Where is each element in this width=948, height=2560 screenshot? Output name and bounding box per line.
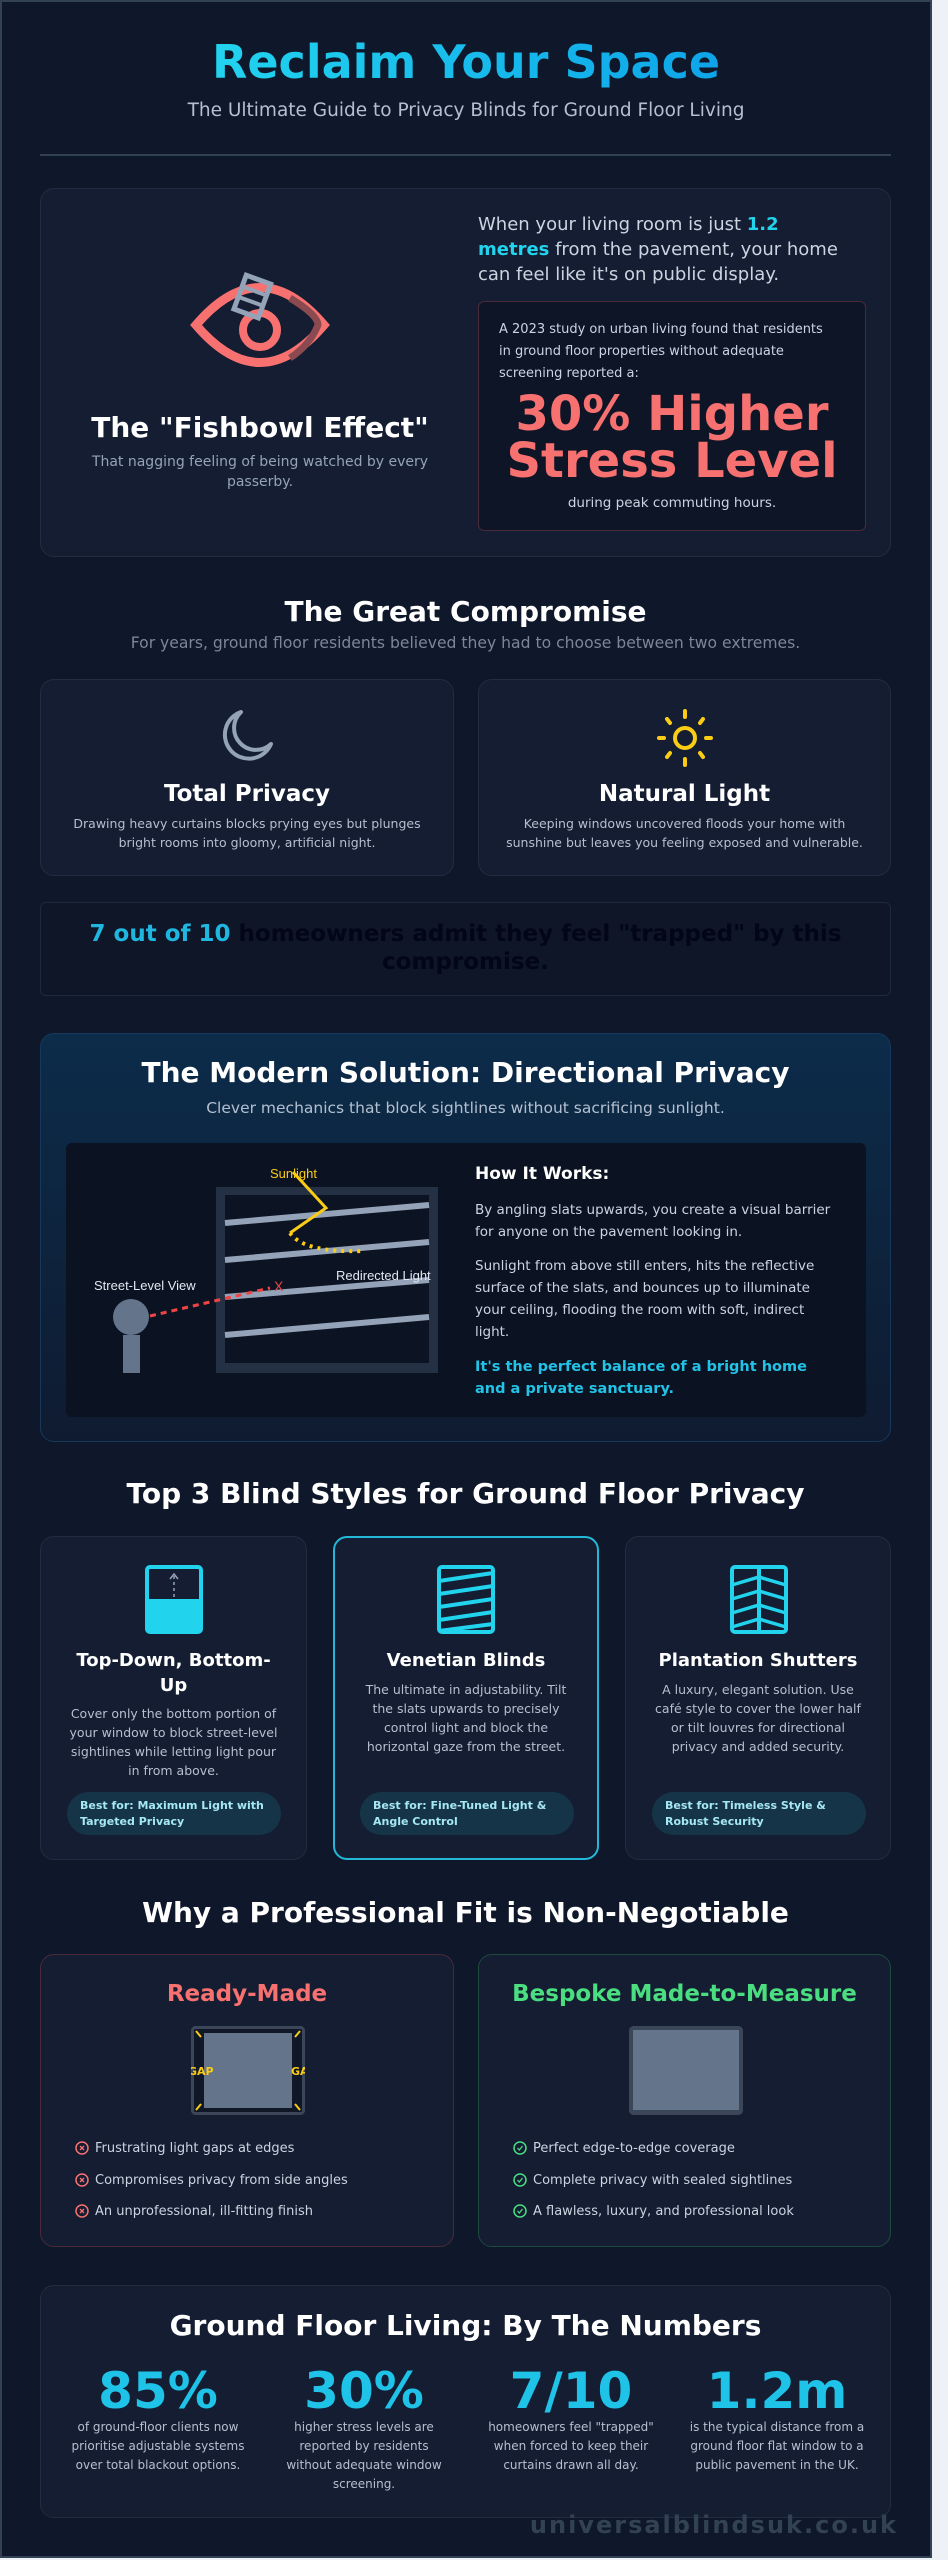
diagram: slats and sightlines: Street-Level View xyxy=(94,1278,196,1293)
text: Keeping windows uncovered floods your home with xyxy=(524,816,845,831)
stat: 85%: of ground-floor clients now xyxy=(78,2420,238,2434)
diagram: slats and sightlines xyxy=(94,1166,438,1373)
stat: 1.2m xyxy=(690,2362,864,2472)
icon: sun xyxy=(657,709,713,767)
list: cons: Frustrating light gaps at edges xyxy=(95,2141,294,2156)
callout: 7 out of 10: 7 out of 10 homeowners admit they feel "trapped" by this xyxy=(90,921,841,947)
pill: best for: Robust Security xyxy=(665,1815,764,1828)
pill: best for xyxy=(652,1792,866,1835)
text xyxy=(366,1682,566,1754)
text: Drawing heavy curtains blocks prying eyes but plunges xyxy=(73,816,421,831)
text: distance intro xyxy=(478,214,838,285)
heading: Ready-Made xyxy=(167,1981,327,2007)
pill: best for xyxy=(67,1792,281,1835)
heading xyxy=(76,1650,271,1696)
list: pros: Complete privacy with sealed sightlines xyxy=(533,2173,792,2188)
pill: best for: Best for: Fine-Tuned Light & xyxy=(373,1799,546,1812)
stat: 1.2m: public pavement in the UK. xyxy=(695,2458,859,2472)
heading: Plantation Shutters xyxy=(659,1650,857,1671)
list: pros xyxy=(513,2141,794,2219)
text: distance intro: metres from the pavement, your home xyxy=(478,239,838,260)
icon: top-down blind xyxy=(145,1565,203,1634)
text: café style to cover the lower half xyxy=(655,1701,861,1716)
text: horizontal gaze from the street. xyxy=(367,1739,565,1754)
stat: 30%: without adequate window xyxy=(286,2458,442,2472)
text: how it works: It's the perfect balance of a bright home xyxy=(475,1359,807,1375)
heading: total privacy: Total Privacy xyxy=(164,781,330,807)
icon: fitted blind xyxy=(629,2026,743,2115)
panel: ready-made xyxy=(40,1954,454,2247)
stat: 30%: 30% xyxy=(304,2362,424,2420)
text: fishbowl sub xyxy=(92,454,428,490)
callout: stress stat: 30% Higher xyxy=(516,386,828,442)
text xyxy=(70,1706,277,1778)
heading: Venetian Blinds xyxy=(387,1650,545,1671)
panel: modern solution xyxy=(40,1033,891,1442)
text: how it works: light. xyxy=(475,1324,509,1340)
stat: 7/10: homeowners feel "trapped" xyxy=(488,2420,654,2434)
text: the slats upwards to precisely xyxy=(372,1701,560,1716)
heading: Bespoke Made-to-Measure xyxy=(512,1981,857,2007)
list: pros: A flawless, luxury, and professional look xyxy=(533,2204,794,2219)
text: sub: Clever mechanics that block sightlines without sacrificing sunlight. xyxy=(206,1099,725,1117)
text xyxy=(506,816,863,850)
stat: 7/10 xyxy=(488,2362,654,2472)
subtitle: The Ultimate Guide to Privacy Blinds for Ground Floor Living xyxy=(188,100,744,121)
text: sunshine but leaves you feeling exposed and vulnerable. xyxy=(506,835,863,850)
heading: Up xyxy=(160,1675,187,1696)
callout: stress stat xyxy=(478,301,866,531)
text: Cover only the bottom portion of xyxy=(71,1706,276,1721)
text: distance intro: can feel like it's on public display. xyxy=(478,264,779,285)
panel: natural light xyxy=(478,679,891,876)
text: how it works: for anyone on the pavement looking in. xyxy=(475,1224,742,1240)
panel: bespoke xyxy=(478,1954,891,2247)
stat: 85%: 85% xyxy=(98,2362,218,2420)
diagram box xyxy=(66,1143,866,1417)
text: The ultimate in adjustability. Tilt xyxy=(366,1682,566,1697)
text: in from above. xyxy=(128,1763,219,1778)
text: how it works: surface of the slats, and bounces up to illuminate xyxy=(475,1280,810,1296)
heading: great compromise: The Great Compromise xyxy=(284,595,647,628)
pill: best for: Targeted Privacy xyxy=(80,1815,184,1828)
icon: eye with blind xyxy=(190,272,330,367)
diagram: slats and sightlines: X xyxy=(274,1278,284,1294)
callout: stress stat: screening reported a: xyxy=(499,366,639,381)
text: distance intro: When your living room is just 1.2 xyxy=(478,214,779,235)
pill: best for: Best for: Timeless Style & xyxy=(665,1799,826,1812)
list: cons xyxy=(75,2141,348,2219)
panel: venetian blinds xyxy=(333,1536,599,1860)
heading: Top-Down, Bottom- xyxy=(76,1650,271,1671)
callout: stress stat: during peak commuting hours. xyxy=(568,495,776,511)
list: cons: Compromises privacy from side angles xyxy=(95,2173,348,2188)
heading: natural light: Natural Light xyxy=(599,781,770,807)
text xyxy=(73,816,421,850)
text: fishbowl sub: That nagging feeling of being watched by every xyxy=(92,454,428,470)
text: bright rooms into gloomy, artificial night. xyxy=(119,835,375,850)
text: fishbowl sub: passerby. xyxy=(227,474,293,490)
callout: 7 out of 10 xyxy=(40,902,891,996)
stat: 1.2m: 1.2m xyxy=(707,2362,847,2420)
panel: plantation shutters xyxy=(625,1536,891,1860)
text: privacy and added security. xyxy=(672,1739,844,1754)
stat: 30%: higher stress levels are xyxy=(294,2420,434,2434)
stat: 7/10: curtains drawn all day. xyxy=(503,2458,639,2472)
heading: Ground Floor Living: By The Numbers xyxy=(170,2309,761,2342)
stat: 85%: over total blackout options. xyxy=(76,2458,240,2472)
icon: moon xyxy=(222,710,274,761)
list: cons: An unprofessional, ill-fitting finish xyxy=(95,2204,313,2219)
title: Reclaim Your Space xyxy=(212,35,720,89)
stat: 85% xyxy=(72,2362,244,2472)
panel: by the numbers xyxy=(40,2285,891,2518)
panel: fishbowl effect xyxy=(40,188,891,557)
list: pros: Perfect edge-to-edge coverage xyxy=(533,2141,735,2156)
callout: stress stat: A 2023 study on urban living found that residents xyxy=(499,322,823,337)
callout: stress stat: Stress Level xyxy=(506,433,838,489)
stat: 30%: reported by residents xyxy=(299,2439,429,2453)
stat: 30% xyxy=(286,2362,442,2491)
diagram: slats and sightlines: Sunlight xyxy=(270,1166,317,1181)
text: how it works: and a private sanctuary. xyxy=(475,1381,674,1397)
text: how it works: By angling slats upwards, you create a visual barrier xyxy=(475,1202,830,1218)
text: how it works: your ceiling, flooding the room with soft, indirect xyxy=(475,1302,804,1318)
pill: best for xyxy=(360,1792,574,1835)
text: sightlines while letting light pour xyxy=(71,1744,276,1759)
text: or tilt louvres for directional xyxy=(671,1720,845,1735)
footer: website: universalblindsuk.co.uk xyxy=(530,2511,898,2539)
panel: top-down bottom-up xyxy=(40,1536,307,1860)
stat: 1.2m: is the typical distance from a xyxy=(690,2420,864,2434)
heading: professional fit: Why a Professional Fit is Non-Negotiable xyxy=(142,1896,789,1929)
heading: fishbowl effect: The "Fishbowl Effect" xyxy=(91,411,429,444)
heading: The Modern Solution: Directional Privacy xyxy=(142,1056,789,1089)
text: how it works: How It Works: xyxy=(475,1164,609,1184)
stat: 7/10: when forced to keep their xyxy=(494,2439,648,2453)
heading: top 3 blind styles: Top 3 Blind Styles for Ground Floor Privacy xyxy=(126,1477,805,1510)
text: compromise sub: For years, ground floor residents believed they had to choose between two extremes. xyxy=(131,634,800,652)
panel: total privacy xyxy=(40,679,454,876)
pill: best for: Best for: Maximum Light with xyxy=(80,1799,264,1812)
text xyxy=(655,1682,862,1754)
callout: stress stat: in ground floor properties without adequate xyxy=(499,344,784,359)
stat: 7/10: 7/10 xyxy=(510,2362,632,2420)
callout: 7 out of 10: compromise. xyxy=(382,949,549,975)
text: your window to block street-level xyxy=(70,1725,277,1740)
icon: venetian xyxy=(437,1565,495,1634)
diagram: slats and sightlines: Redirected Light xyxy=(336,1268,431,1283)
pill: best for: Angle Control xyxy=(373,1815,458,1828)
text: A luxury, elegant solution. Use xyxy=(662,1682,854,1697)
stat: 85%: prioritise adjustable systems xyxy=(72,2439,244,2453)
text: how it works: Sunlight from above still enters, hits the reflective xyxy=(475,1258,814,1274)
stat: 1.2m: ground floor flat window to a xyxy=(690,2439,864,2453)
icon: gapped blind xyxy=(191,2026,305,2115)
text: control light and block the xyxy=(384,1720,548,1735)
stat: 30%: screening. xyxy=(333,2477,395,2491)
icon: shutters xyxy=(730,1565,788,1634)
text: how it works xyxy=(475,1164,830,1397)
